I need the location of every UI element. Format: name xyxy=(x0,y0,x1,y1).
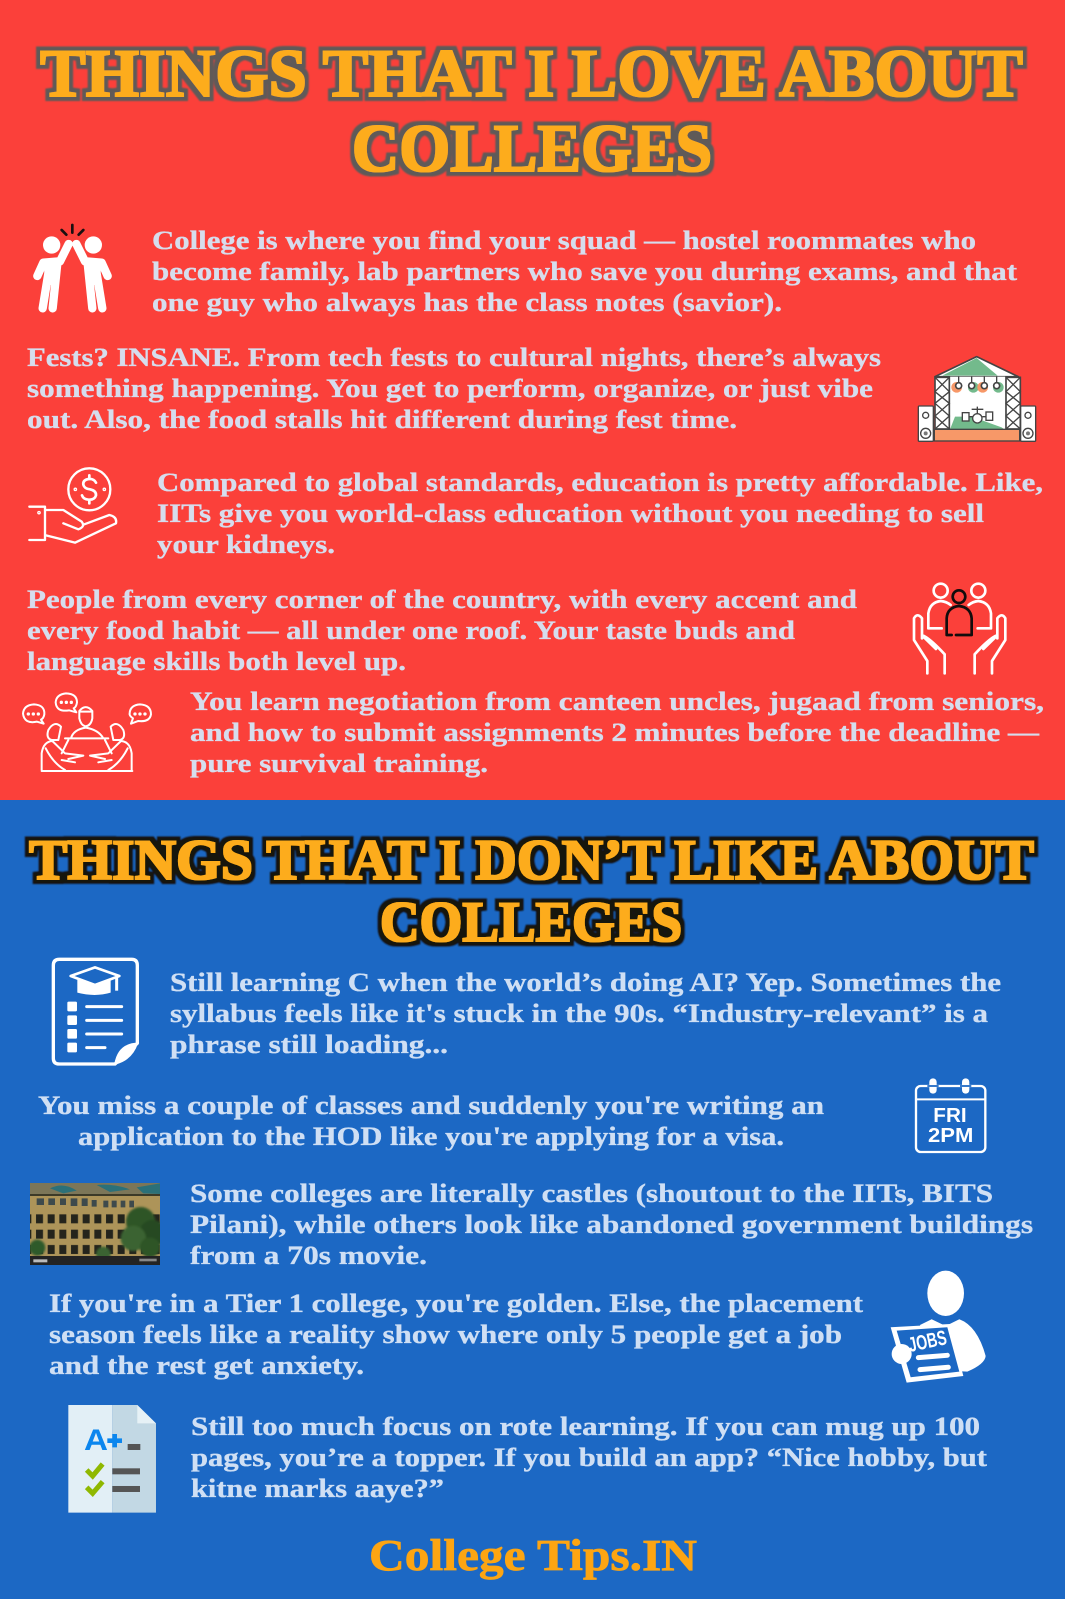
heading: love: COLLEGES xyxy=(352,110,712,186)
text: rote learning xyxy=(191,1412,987,1503)
text: attendance: application to the HOD like you're applying for a visa. xyxy=(78,1122,784,1151)
text: diversity: People from every corner of the country, with every accent and xyxy=(27,585,858,614)
text: diversity xyxy=(27,585,858,676)
panel: things I love xyxy=(0,0,1065,800)
icon: grade sheet xyxy=(68,1405,156,1513)
text: placements xyxy=(49,1289,863,1380)
text: squad: one guy who always has the class notes (savior). xyxy=(152,288,782,317)
heading: love xyxy=(40,35,1023,186)
panel: things I don't like xyxy=(0,800,1065,1599)
text: syllabus: Still learning C when the world’s doing AI? Yep. Sometimes the xyxy=(170,968,1001,997)
icon: grade sheet: A xyxy=(84,1424,108,1457)
text: affordable: your kidneys. xyxy=(157,530,335,559)
icon: festival stage xyxy=(918,357,1036,441)
heading: love: THINGS THAT I LOVE ABOUT xyxy=(40,35,1023,111)
text: infrastructure: Some colleges are literally castles (shoutout to the IITs, BITS xyxy=(190,1179,993,1208)
heading: dislike xyxy=(29,829,1034,954)
text: fests xyxy=(27,343,881,434)
text: rote learning: pages, you’re a topper. If you build an app? “Nice hobby, but xyxy=(191,1443,987,1472)
text: diversity: every food habit — all under one roof. Your taste buds and xyxy=(27,616,796,645)
image: old college building xyxy=(30,1183,160,1265)
text: placements: and the rest get anxiety. xyxy=(49,1351,364,1380)
heading: dislike: COLLEGES xyxy=(380,891,682,954)
text: syllabus: syllabus feels like it's stuck in the 90s. “Industry-relevant” is a xyxy=(170,999,988,1028)
text: survival: pure survival training. xyxy=(190,749,488,778)
icon: syllabus document xyxy=(53,959,137,1064)
icon: hands holding people xyxy=(914,584,1005,673)
text: placements: season feels like a reality show where only 5 people get a job xyxy=(49,1320,842,1349)
text: survival: You learn negotiation from canteen uncles, jugaad from seniors, xyxy=(190,687,1044,716)
text: fests: something happening. You get to perform, organize, or just vibe xyxy=(27,374,873,403)
icon: group discussion xyxy=(23,693,151,771)
text: placements: If you're in a Tier 1 college, you're golden. Else, the placement xyxy=(49,1289,863,1318)
text: affordable: Compared to global standards, education is pretty affordable. Like, xyxy=(157,468,1043,497)
icon: person holding jobs sign xyxy=(891,1271,986,1383)
icon: calendar xyxy=(916,1078,985,1152)
text: survival: and how to submit assignments 2 minutes before the deadline — xyxy=(190,718,1040,747)
icon: calendar: 2PM xyxy=(928,1124,973,1147)
text: infrastructure: from a 70s movie. xyxy=(190,1241,427,1270)
text: attendance: You miss a couple of classes and suddenly you're writing an xyxy=(38,1091,825,1120)
text: rote learning: kitne marks aaye?” xyxy=(191,1474,444,1503)
icon: hand holding coin xyxy=(29,468,116,543)
text: fests: Fests? INSANE. From tech fests to cultural nights, there’s always xyxy=(27,343,881,372)
text: affordable: IITs give you world-class education without you needing to sell xyxy=(157,499,984,528)
text: survival xyxy=(190,687,1044,778)
footer brand: College Tips.IN xyxy=(369,1531,697,1580)
icon: high five xyxy=(37,225,108,308)
text: squad: College is where you find your squad — hostel roommates who xyxy=(152,226,976,255)
text: squad xyxy=(152,226,1017,317)
text: fests: out. Also, the food stalls hit different during fest time. xyxy=(27,405,737,434)
icon: calendar: FRI xyxy=(933,1104,967,1127)
text: rote learning: Still too much focus on rote learning. If you can mug up 100 xyxy=(191,1412,980,1441)
text: infrastructure: Pilani), while others look like abandoned government buildings xyxy=(190,1210,1033,1239)
text: affordable xyxy=(157,468,1043,559)
heading: dislike: THINGS THAT I DON’T LIKE ABOUT xyxy=(29,829,1034,892)
text: syllabus: phrase still loading... xyxy=(170,1030,448,1059)
icon: person holding jobs sign: JOBS xyxy=(906,1326,949,1357)
text: squad: become family, lab partners who save you during exams, and that xyxy=(152,257,1017,286)
text: diversity: language skills both level up. xyxy=(27,647,406,676)
text: syllabus xyxy=(170,968,1001,1059)
text: infrastructure xyxy=(190,1179,1033,1270)
text: attendance xyxy=(38,1091,825,1151)
